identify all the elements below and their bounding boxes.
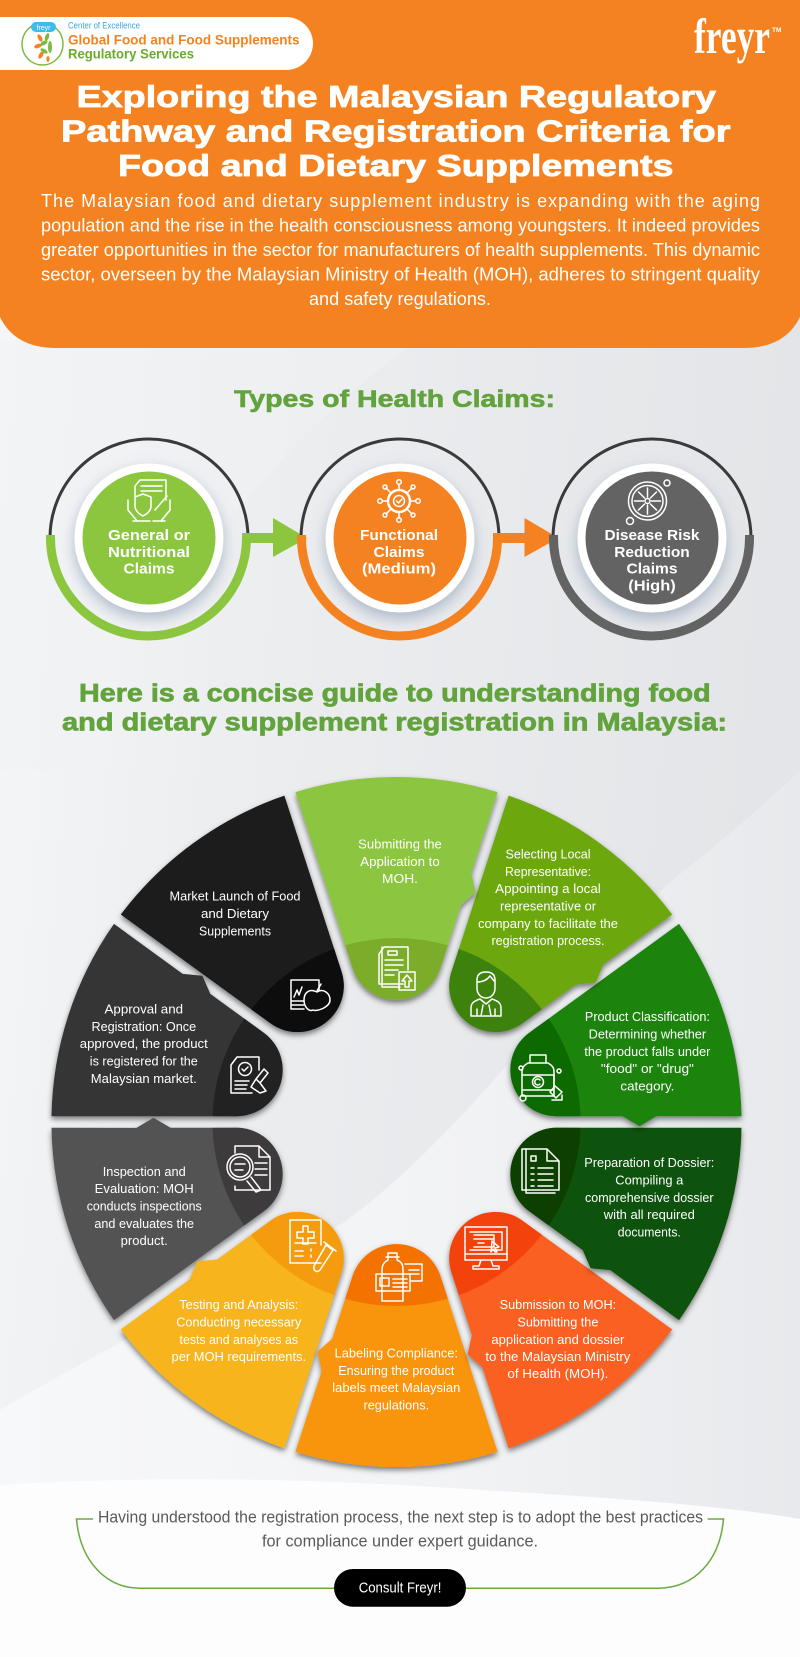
step: market launch: Supplements — [199, 924, 271, 938]
step: approval and registration: Approval and — [105, 1002, 183, 1016]
step: product classification: Product Classification: — [585, 1009, 710, 1024]
claim: disease risk reduction: Disease Risk — [604, 527, 700, 544]
step: labeling compliance: labels meet Malaysian — [332, 1380, 460, 1395]
registration wheel — [37, 777, 756, 1467]
logo pill: centre of excellence — [0, 17, 313, 70]
step: preparation of dossier: documents. — [618, 1224, 681, 1240]
step: preparation of dossier: Compiling a — [615, 1172, 684, 1188]
closing text — [98, 1507, 703, 1551]
icon: chart and apple — [291, 980, 330, 1010]
panel: orange header — [0, 0, 800, 348]
freyr logo: TM — [772, 27, 781, 34]
icon: supplement bottle — [519, 1055, 562, 1101]
button: consult freyr — [334, 1569, 466, 1607]
step: submission to MOH: Submitting the — [517, 1314, 598, 1330]
step: product classification: the product falls under — [584, 1044, 711, 1059]
step: market launch — [112, 783, 407, 1083]
step: submitting the application: MOH. — [382, 871, 418, 886]
closing call to action — [76, 1507, 724, 1607]
claim: functional: Claims — [374, 544, 424, 561]
title: Pathway and Registration Criteria for — [61, 114, 730, 149]
step: testing and analysis: per MOH requirements. — [172, 1349, 306, 1364]
icon: document with shield — [128, 480, 170, 521]
step: product classification: Determining whether — [589, 1026, 707, 1042]
step: inspection and evaluation: product. — [121, 1233, 168, 1248]
step: inspection and evaluation: and evaluates the — [94, 1216, 194, 1231]
closing text: for compliance under expert guidance. — [262, 1532, 538, 1551]
step: labeling compliance — [295, 1244, 498, 1467]
step: labeling compliance: Labeling Compliance: — [335, 1346, 458, 1360]
claim: general or nutritional: Nutritional — [108, 544, 190, 561]
icon: gear with nodes — [378, 480, 420, 522]
step: testing and analysis — [112, 1161, 407, 1461]
claim: functional: Functional — [360, 527, 438, 544]
step: inspection and evaluation: Evaluation: MOH — [95, 1181, 194, 1196]
step: approval and registration: Registration: Once — [91, 1019, 196, 1034]
intro paragraph: The Malaysian food and dietary supplement industry is expanding with the aging — [41, 191, 760, 211]
freyr logo: freyr — [694, 8, 770, 64]
icon: bottle and label — [376, 1253, 422, 1301]
step: selecting local representative: Appointing a local — [495, 881, 601, 896]
step: submission to MOH: application and dossier — [491, 1332, 625, 1347]
logo pill: centre of excellence: Regulatory Services — [68, 46, 194, 62]
closing text: Having understood the registration process, the next step is to adopt the best practices — [98, 1507, 703, 1526]
icon: virus in circle — [626, 480, 670, 524]
heading: registration guide — [62, 680, 727, 737]
step: preparation of dossier: with all required — [603, 1207, 695, 1222]
step: submission to MOH — [386, 1161, 681, 1461]
step: selecting local representative: Representative: — [505, 864, 591, 879]
step: inspection and evaluation: conducts inspections — [87, 1198, 202, 1214]
heading: registration guide: Here is a concise guide to understanding food — [79, 680, 711, 708]
intro paragraph: greater opportunities in the sector for manufacturers of health supplements. This dynamic — [41, 240, 760, 260]
step: labeling compliance: Ensuring the product — [338, 1363, 455, 1378]
step: approval and registration: is registered for the — [90, 1054, 198, 1068]
step: selecting local representative: company to facilitate the — [478, 916, 618, 931]
claim: disease risk reduction — [553, 439, 751, 636]
step: testing and analysis: Conducting necessary — [176, 1314, 302, 1330]
intro paragraph: population and the rise in the health consciousness among youngsters. It indeed provides — [41, 216, 760, 236]
intro paragraph — [41, 191, 760, 309]
intro paragraph: sector, overseen by the Malaysian Ministry of Health (MOH), adheres to stringent quality — [41, 264, 760, 284]
arrow: green — [242, 518, 307, 557]
step: submission to MOH: of Health (MOH). — [507, 1366, 608, 1381]
claim: disease risk reduction: (High) — [628, 578, 676, 595]
step: inspection and evaluation: Inspection and — [103, 1164, 186, 1179]
green bracket — [76, 1519, 724, 1588]
step: inspection and evaluation — [37, 1064, 312, 1325]
title: Exploring the Malaysian Regulatory — [76, 79, 717, 114]
claim: general or nutritional — [50, 439, 248, 636]
claim: functional — [301, 439, 499, 636]
claim: general or nutritional: General or — [108, 527, 190, 544]
intro paragraph: and safety regulations. — [309, 289, 491, 309]
claim: general or nutritional: Claims — [124, 561, 174, 578]
step: testing and analysis: tests and analyses as — [180, 1332, 299, 1347]
claim: functional: (Medium) — [362, 561, 436, 578]
step: preparation of dossier — [481, 1064, 756, 1325]
step: product classification — [481, 919, 756, 1180]
step: market launch: Market Launch of Food — [170, 888, 300, 904]
icon: document list — [522, 1149, 559, 1193]
step: preparation of dossier: comprehensive dossier — [585, 1190, 714, 1205]
step: submission to MOH: to the Malaysian Ministry — [485, 1349, 631, 1364]
title: Food and Dietary Supplements — [118, 148, 674, 183]
icon: document upload — [379, 947, 415, 990]
icon: person — [471, 972, 501, 1016]
logo pill: centre of excellence: Global Food and Food Supplements — [68, 31, 300, 47]
step: approval and registration — [37, 919, 312, 1180]
step: submitting the application: Application to — [360, 854, 440, 869]
icon: monitor with cursor — [465, 1227, 507, 1269]
heading: types of health claims: Types of Health Claims: — [234, 386, 555, 413]
step: selecting local representative: Selecting Local — [506, 846, 591, 862]
logo pill: centre of excellence: Center of Excellence — [68, 21, 140, 31]
title — [61, 79, 730, 183]
step: preparation of dossier: Preparation of Dossier: — [584, 1155, 714, 1170]
claim flow diagram — [50, 439, 751, 636]
icon: stamped document — [231, 1057, 268, 1093]
step: product classification: category. — [620, 1078, 674, 1094]
step: approval and registration: approved, the product — [80, 1036, 208, 1051]
button: consult freyr: Consult Freyr! — [359, 1581, 441, 1597]
step: submitting the application — [295, 777, 498, 1000]
icon: report and test tube — [290, 1220, 336, 1271]
step: selecting local representative: representative or — [500, 898, 597, 914]
step: testing and analysis: Testing and Analysis: — [179, 1297, 298, 1312]
step: submission to MOH: Submission to MOH: — [500, 1297, 616, 1312]
logo pill: centre of excellence: freyr — [36, 25, 51, 32]
arrow: orange — [493, 518, 558, 557]
step: market launch: and Dietary — [201, 906, 270, 921]
icon: magnifier on document — [227, 1146, 270, 1192]
claim: disease risk reduction: Claims — [626, 561, 678, 578]
step: approval and registration: Malaysian market. — [91, 1071, 197, 1086]
step: selecting local representative — [386, 783, 681, 1083]
heading: registration guide: and dietary supplement registration in Malaysia: — [62, 709, 727, 737]
step: submitting the application: Submitting the — [358, 836, 442, 852]
step: labeling compliance: regulations. — [364, 1398, 429, 1412]
step: product classification: "food" or "drug" — [601, 1061, 694, 1076]
step: selecting local representative: registration process. — [492, 933, 604, 948]
claim: disease risk reduction: Reduction — [614, 544, 690, 561]
